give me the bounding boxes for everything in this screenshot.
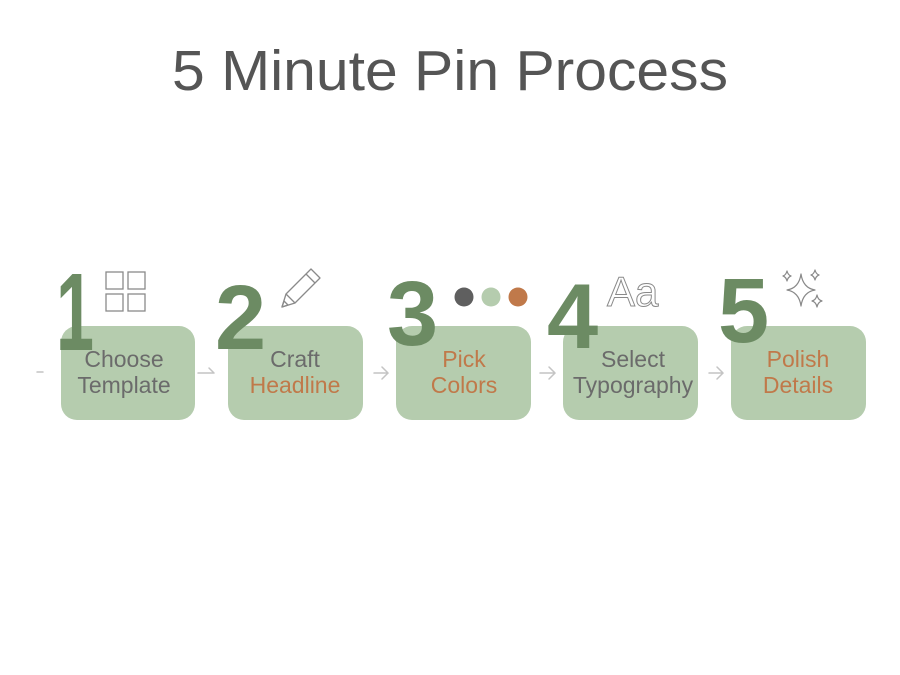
step 4: Typography — [573, 372, 694, 398]
step 4: 4 — [547, 266, 598, 368]
step 3 — [387, 263, 531, 420]
step 2: 2 — [215, 267, 266, 369]
step 1: Choose — [84, 346, 164, 372]
step 1: 1 — [56, 251, 94, 374]
step 5 — [718, 260, 866, 420]
step 5: 5 — [718, 260, 769, 362]
icon: pencil — [282, 269, 320, 307]
step 2 — [215, 267, 363, 420]
icon: Aa: Aa — [607, 268, 659, 315]
icon: template grid — [106, 272, 145, 311]
arrows — [37, 367, 723, 379]
title: 5 Minute Pin Process — [172, 39, 728, 103]
step 2: Craft — [270, 346, 321, 372]
icon: color dots — [454, 288, 528, 306]
step 3: 3 — [387, 263, 438, 365]
step 1 — [56, 251, 195, 420]
step 5: Polish — [767, 346, 829, 372]
step 4: Select — [601, 346, 666, 372]
step 2: Headline — [250, 372, 340, 398]
step 4 — [547, 266, 698, 420]
step 1: Template — [77, 372, 171, 398]
icon: sparkles — [783, 270, 822, 307]
step 3: Colors — [431, 372, 497, 398]
step 5: Details — [763, 372, 833, 398]
step 3: Pick — [442, 346, 486, 372]
